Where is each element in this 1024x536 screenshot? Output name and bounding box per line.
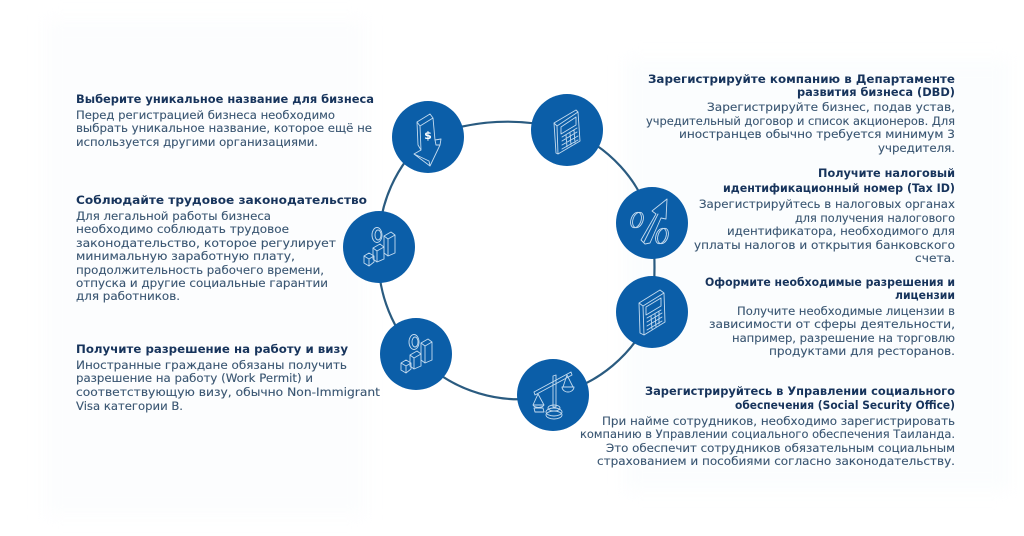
text: permits and licences: Получите необходимые лицензии в xyxy=(737,304,955,318)
text: labour law: минимальную заработную плату, xyxy=(76,249,295,263)
text: work permit and visa xyxy=(76,342,381,413)
heading: tax ID xyxy=(723,166,955,195)
text: permits and licences: продуктами для ресторанов. xyxy=(769,344,955,358)
text: social security office xyxy=(580,384,955,468)
text: social security office: страхованием и пособиями согласно законодательству. xyxy=(597,454,955,468)
icon: down arrow with dollar: $ xyxy=(424,129,432,142)
text: tax ID: Зарегистрируйтесь в налоговых органах xyxy=(699,197,955,211)
text: register with DBD: учредителя. xyxy=(878,141,955,155)
heading: labour law: Соблюдайте трудовое законодательство xyxy=(76,193,367,207)
text: work permit and visa: Visa категории B. xyxy=(76,399,183,413)
text: register with DBD: Зарегистрируйте бизнес, подав устав, xyxy=(707,100,955,114)
icon: percent arrow xyxy=(616,187,688,259)
text: permits and licences: например, разрешение на торговлю xyxy=(732,331,955,345)
text: register with DBD xyxy=(646,72,955,155)
heading: DBD: развития бизнеса (DBD) xyxy=(797,85,955,99)
text: work permit and visa: Иностранные граждане обязаны получить xyxy=(76,358,347,372)
icon: down arrow with dollar xyxy=(392,101,464,173)
heading: tax ID: Получите налоговый xyxy=(818,166,955,180)
text: social security office: При найме сотрудников, необходимо зарегистрировать xyxy=(602,414,955,428)
heading: DBD xyxy=(648,72,955,99)
icon: bars with coin (work permit) xyxy=(380,318,452,390)
text: labour law: отпуска и другие социальные гарантии xyxy=(76,276,328,290)
text: labour law xyxy=(76,193,367,303)
heading: tax ID: идентификационный номер (Tax ID) xyxy=(723,181,955,195)
text: labour law: для работников. xyxy=(76,289,180,303)
text: work permit and visa: соответствующую визу, обычно Non-Immigrant xyxy=(76,385,381,399)
text: choose a unique name xyxy=(76,92,374,149)
text: tax ID: для получения налогового xyxy=(795,211,955,225)
text: tax ID: счета. xyxy=(915,251,955,265)
text: register with DBD: иностранцев обычно требуется минимум 3 xyxy=(679,127,955,141)
text: social security office: компанию в Управлении социального обеспечения Таиланда. xyxy=(580,427,955,441)
heading: work permit: Получите разрешение на работу и визу xyxy=(76,342,349,356)
connecting ring xyxy=(379,122,654,399)
text: permits and licences: зависимости от сферы деятельности, xyxy=(709,317,955,331)
icon: terminal (DBD) xyxy=(531,94,603,166)
heading: unique name: Выберите уникальное название для бизнеса xyxy=(76,92,374,106)
text: labour law: необходимо соблюдать трудовое xyxy=(76,222,289,236)
text: choose a unique name: выбрать уникальное название, которое ещё не xyxy=(76,121,372,135)
text: social security office: Это обеспечит сотрудников обязательным социальным xyxy=(606,441,955,455)
text: tax ID: идентификатора, необходимого для xyxy=(727,224,955,238)
text: register with DBD: учредительный договор и список акционеров. Для xyxy=(646,114,955,128)
heading: DBD: Зарегистрируйте компанию в Департаменте xyxy=(648,72,955,86)
text: labour law: Для легальной работы бизнеса xyxy=(76,209,271,223)
heading: licences: лицензии xyxy=(895,288,955,302)
text: choose a unique name: используется другими организациями. xyxy=(76,135,318,149)
text: labour law: продолжительность рабочего времени, xyxy=(76,263,324,277)
text: permits and licences xyxy=(705,275,955,358)
heading: social security: обеспечения (Social Security Office) xyxy=(735,398,955,412)
text: tax ID xyxy=(694,166,955,265)
heading: licences xyxy=(705,275,955,302)
text: choose a unique name: Перед регистрацией бизнеса необходимо xyxy=(76,108,335,122)
heading: licences: Оформите необходимые разрешения и xyxy=(705,275,955,289)
text: tax ID: уплаты налогов и открытия банковского xyxy=(694,238,955,252)
icon: bars with coin (labour law) xyxy=(343,211,415,283)
heading: social security: Зарегистрируйтесь в Управлении социального xyxy=(645,384,955,398)
text: work permit and visa: разрешение на работу (Work Permit) и xyxy=(76,371,313,385)
heading: social security xyxy=(645,384,955,412)
icon: scales xyxy=(517,359,589,431)
icon: terminal (licences) xyxy=(616,276,688,348)
text: labour law: законодательство, которое регулирует xyxy=(76,236,336,250)
